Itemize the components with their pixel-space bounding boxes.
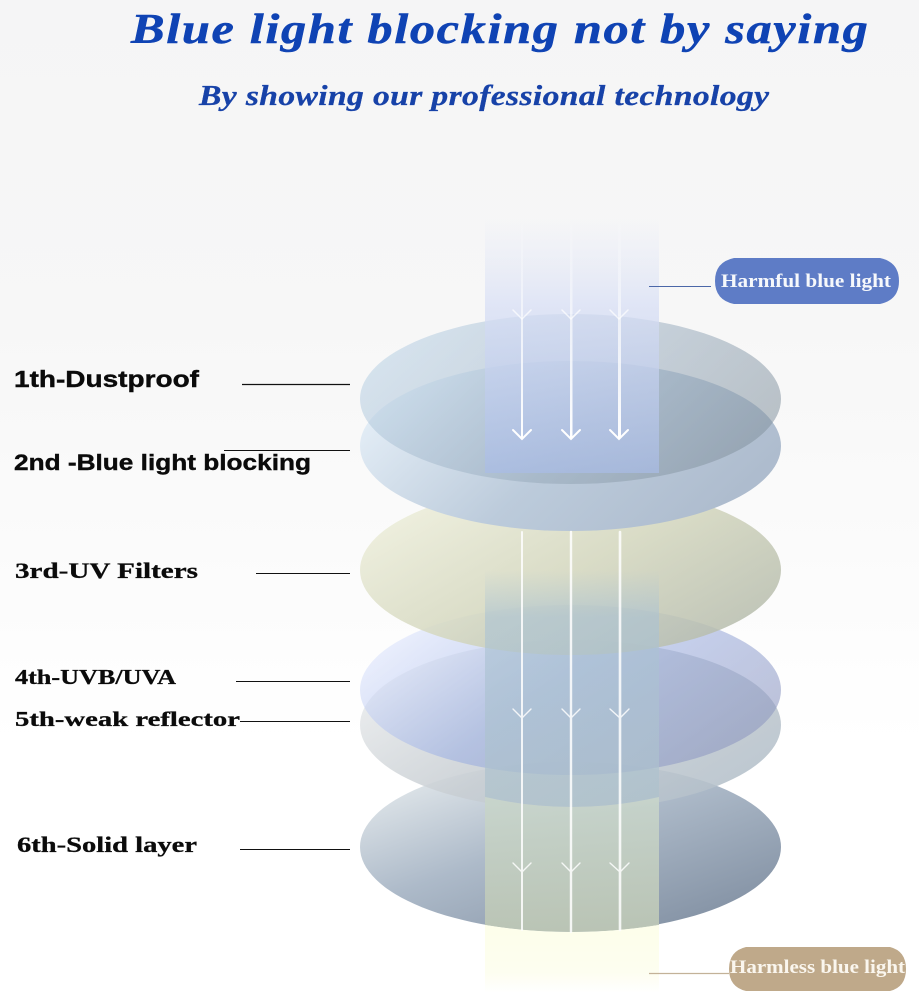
label: 5th weak reflector: 5th-weak reflector [15, 707, 240, 731]
beam: filtered light through solid layer [485, 797, 659, 932]
beam: harmless light leaving [485, 925, 659, 993]
beam: harmful blue light entering [485, 215, 659, 473]
lens layer 4: UVB/UVA [360, 605, 781, 775]
label: 6th solid layer: 6th-Solid layer [17, 832, 197, 857]
lens layer 3: UV filters [360, 485, 781, 655]
callout: harmful blue light: Harmful blue light [721, 271, 892, 292]
label: 3rd UV filters: 3rd-UV Filters [15, 558, 199, 583]
lens layer 2: blue light blocking [360, 361, 781, 531]
label: 2nd blue light blocking: 2nd -Blue light blocking [14, 450, 311, 475]
label: 1th dustproof: 1th-Dustproof [14, 366, 199, 392]
callout: harmful blue light [649, 258, 899, 304]
arrows: upper set [513, 215, 628, 439]
arrows: lower set [513, 532, 629, 932]
lens layer 1: dustproof [360, 314, 781, 484]
callout: harmless blue light: Harmless blue light [730, 957, 906, 978]
beam: light passing the lower lenses [485, 570, 659, 807]
lens layer 6: solid layer [360, 762, 781, 932]
label: 4th UVB/UVA: 4th-UVB/UVA [15, 665, 177, 689]
subtitle: By showing our professional technology [198, 80, 769, 111]
callout: harmless blue light [649, 947, 906, 991]
lens layer 5: weak reflector [360, 640, 781, 810]
title: Blue light blocking not by saying [130, 7, 868, 53]
